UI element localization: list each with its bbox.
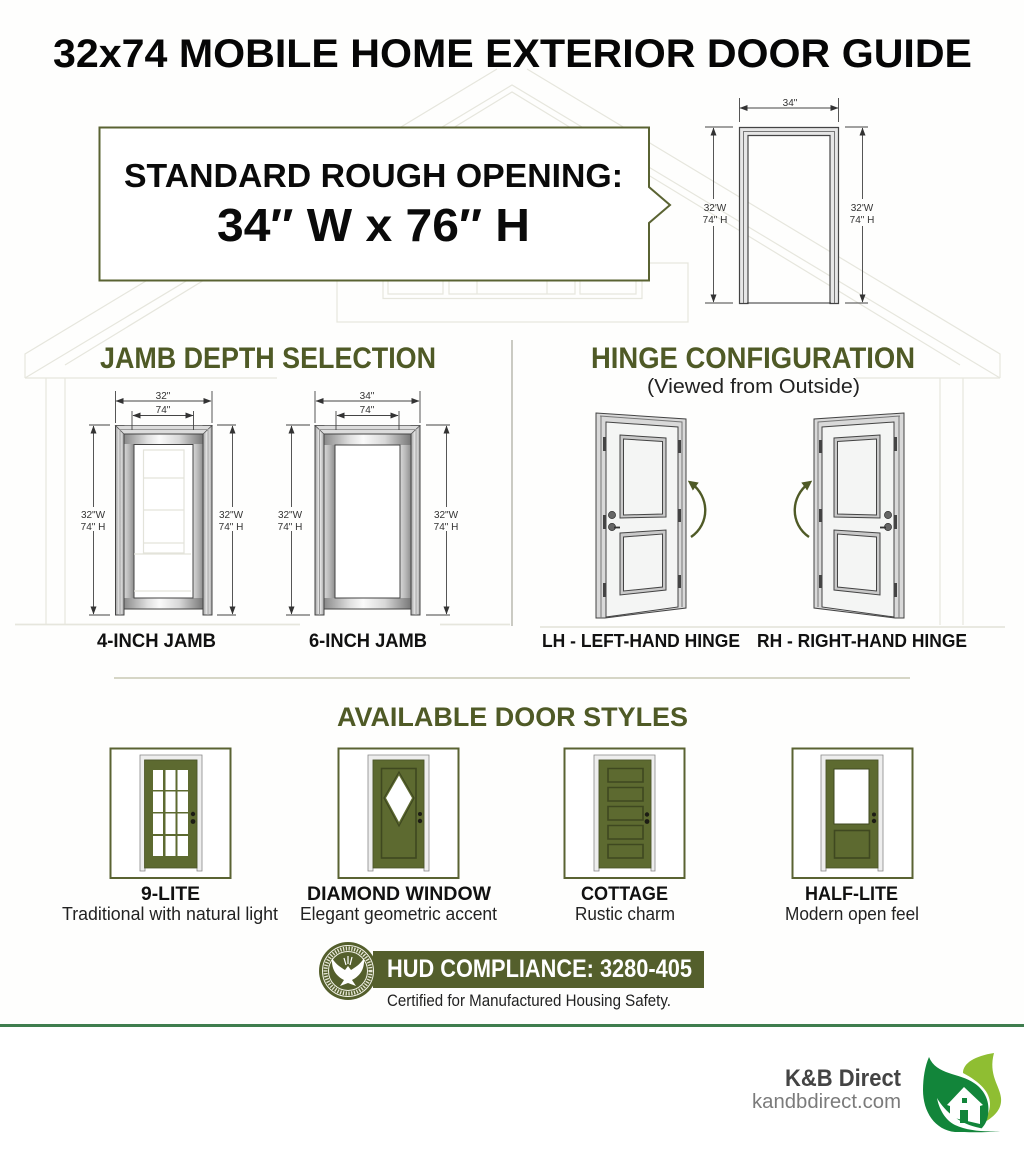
diagram: rough opening door frame: 32'W xyxy=(704,203,727,214)
caption: diamond window: Elegant geometric accent xyxy=(300,904,497,924)
horizontal divider xyxy=(114,677,910,679)
diagram: rough opening door frame: 32'W xyxy=(851,203,874,214)
title: 32x74 MOBILE HOME EXTERIOR DOOR GUIDE xyxy=(53,32,972,76)
diagram: rough opening door frame: 34" xyxy=(783,98,798,109)
panel: cottage door xyxy=(564,748,684,878)
icon: K&B Direct leaf and house logo xyxy=(923,1053,1001,1132)
subheading: viewed from outside: (Viewed from Outside) xyxy=(647,376,860,398)
caption: cottage: COTTAGE xyxy=(581,884,668,905)
diagram: left-hand hinge door xyxy=(596,413,705,618)
icon: HUD seal xyxy=(319,942,377,1000)
label: left-hand hinge: LH - LEFT-HAND HINGE xyxy=(542,631,740,651)
caption: cottage: Rustic charm xyxy=(575,904,675,924)
panel: 9-lite door xyxy=(110,748,230,878)
diagram: rough opening door frame: 74" H xyxy=(850,215,874,226)
vertical divider xyxy=(511,340,513,626)
badge title: HUD COMPLIANCE: 3280-405 xyxy=(387,955,692,983)
diagram: 4-inch jamb door: 32"W xyxy=(219,510,244,521)
diagram: 4-inch jamb door xyxy=(81,391,244,615)
diagram: 4-inch jamb door: 74" H xyxy=(81,522,105,533)
footer brand name: K&B Direct xyxy=(785,1065,901,1092)
background: ghosted house outline xyxy=(15,69,1005,627)
diagram: 6-inch jamb door: 74" H xyxy=(434,522,458,533)
callout value: 34″ W x 76″ H xyxy=(217,199,530,251)
caption: 9-lite xyxy=(62,884,278,924)
caption: half-lite: Modern open feel xyxy=(785,904,919,924)
heading: hinge configuration: HINGE CONFIGURATION xyxy=(591,342,915,375)
diagram: rough opening door frame xyxy=(703,98,874,304)
diagram: 6-inch jamb door xyxy=(278,391,459,615)
caption: 9-lite: 9-LITE xyxy=(141,884,200,905)
diagram: 6-inch jamb door: 32"W xyxy=(278,510,303,521)
caption: cottage xyxy=(575,884,675,924)
badge subtitle: Certified for Manufactured Housing Safety. xyxy=(387,992,671,1010)
footer website: kandbdirect.com xyxy=(752,1090,901,1113)
label: right-hand hinge: RH - RIGHT-HAND HINGE xyxy=(757,631,967,651)
diagram: right-hand hinge door xyxy=(795,413,904,618)
label: 4-inch jamb: 4-INCH JAMB xyxy=(97,631,216,652)
diagram: 6-inch jamb door: 34" xyxy=(360,391,375,402)
diagram: rough opening door frame: 74" H xyxy=(703,215,727,226)
label: 6-inch jamb: 6-INCH JAMB xyxy=(309,631,427,652)
diagram: 6-inch jamb door: 74" H xyxy=(278,522,302,533)
diagram: 4-inch jamb door: 74" H xyxy=(219,522,243,533)
panel: half-lite door xyxy=(792,748,912,878)
diagram: 4-inch jamb door: 32" xyxy=(156,391,171,402)
diagram: 4-inch jamb door: 32"W xyxy=(81,510,106,521)
diagram: 4-inch jamb door: 74" xyxy=(156,405,171,416)
footer band xyxy=(0,1024,1024,1154)
badge: HUD compliance xyxy=(319,942,704,1010)
heading: jamb depth selection: JAMB DEPTH SELECTION xyxy=(100,342,436,375)
caption: 9-lite: Traditional with natural light xyxy=(62,904,278,924)
heading: available door styles: AVAILABLE DOOR STYLES xyxy=(337,702,688,732)
caption: half-lite: HALF-LITE xyxy=(805,884,898,905)
callout: standard rough opening xyxy=(100,128,670,280)
caption: diamond window: DIAMOND WINDOW xyxy=(307,884,491,905)
diagram: 6-inch jamb door: 74" xyxy=(360,405,375,416)
caption: half-lite xyxy=(785,884,919,924)
diagram: 6-inch jamb door: 32"W xyxy=(434,510,459,521)
caption: diamond window xyxy=(300,884,497,924)
panel: diamond window door xyxy=(338,748,458,878)
callout heading: STANDARD ROUGH OPENING: xyxy=(124,157,623,194)
